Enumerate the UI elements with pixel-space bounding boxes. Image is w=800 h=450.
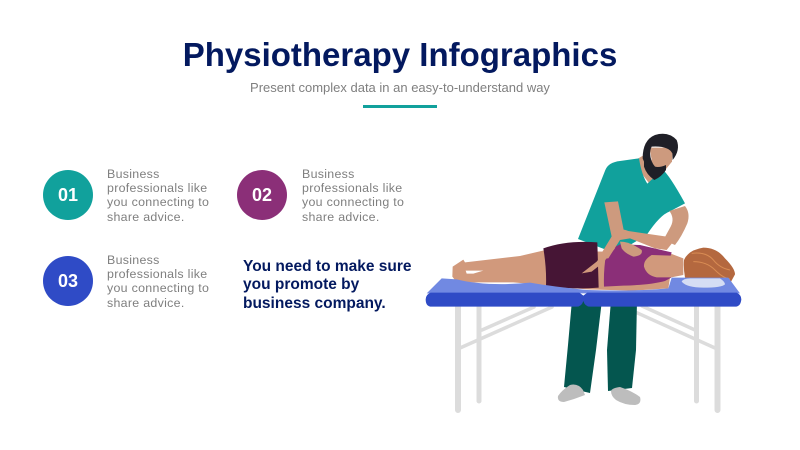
- badge 01: [43, 170, 93, 220]
- text block 02: you connecting to: [302, 195, 404, 209]
- table top: [427, 278, 740, 293]
- subtitle: Present complex data in an easy-to-understand way: [250, 80, 550, 95]
- text block 03: you connecting to: [107, 281, 209, 295]
- badge 01: 01: [58, 185, 78, 205]
- therapist neck: [638, 155, 663, 184]
- patient shorts: [543, 242, 599, 288]
- text block 01: [107, 167, 209, 224]
- table band: [426, 293, 741, 307]
- patient top: [604, 244, 672, 287]
- callout: [243, 258, 412, 312]
- text block 03: share advice.: [107, 296, 185, 310]
- table legs: [458, 300, 718, 410]
- text block 03: professionals like: [107, 267, 207, 281]
- pillow: [682, 278, 725, 288]
- therapist trousers: [564, 300, 637, 393]
- badge 02: [237, 170, 287, 220]
- title: Physiotherapy Infographics: [183, 36, 617, 73]
- text block 02: share advice.: [302, 210, 380, 224]
- badge 03: [43, 256, 93, 306]
- text block 01: Business: [107, 167, 160, 181]
- patient body: [452, 250, 683, 291]
- text block 02: [302, 167, 404, 224]
- text block 01: you connecting to: [107, 195, 209, 209]
- text block 02: professionals like: [302, 181, 402, 195]
- patient hair: [684, 248, 735, 282]
- therapist left upper arm: [604, 201, 624, 237]
- badge 03: 03: [58, 271, 78, 291]
- therapist right arm: [663, 206, 689, 245]
- text block 03: Business: [107, 253, 160, 267]
- accent underline: [363, 105, 437, 108]
- callout: business company.: [243, 295, 386, 312]
- text block 01: share advice.: [107, 210, 185, 224]
- patient hand on hip: [582, 243, 615, 273]
- callout: You need to make sure: [243, 258, 412, 275]
- therapist shirt: [578, 158, 685, 250]
- text block 03: [107, 253, 209, 310]
- callout: you promote by: [243, 276, 359, 293]
- text block 01: professionals like: [107, 181, 207, 195]
- text block 02: Business: [302, 167, 355, 181]
- therapist shoes: [558, 385, 640, 405]
- badge 02: 02: [252, 185, 272, 205]
- therapist forearm: [598, 229, 673, 258]
- therapist head: [643, 134, 678, 180]
